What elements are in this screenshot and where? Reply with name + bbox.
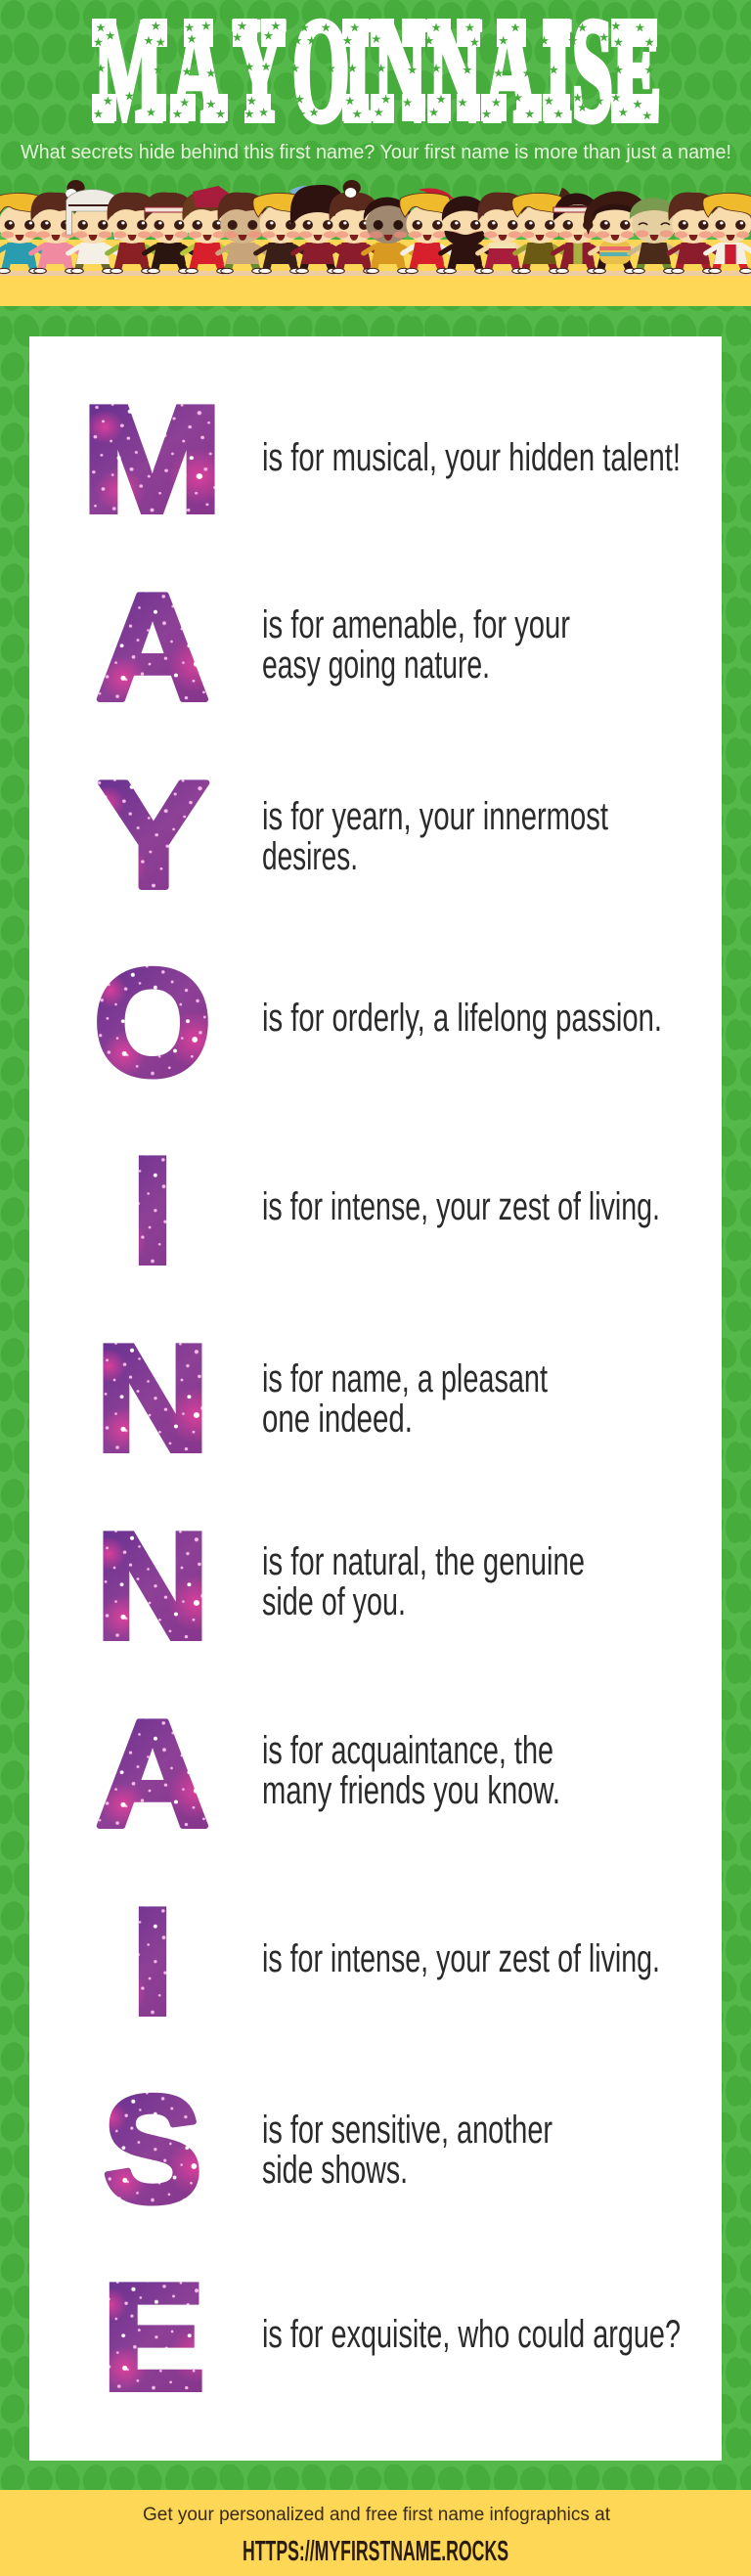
row: N second: side of you.	[262, 1580, 406, 1623]
letter A second: A	[96, 1689, 209, 1858]
row: S	[103, 2065, 552, 2234]
banner: yellow band	[0, 240, 751, 306]
row: A	[96, 562, 570, 732]
letter O: O	[94, 938, 211, 1107]
letter E: E	[102, 2252, 205, 2422]
subtitle: What secrets hide behind this first name? Your first name is more than just a name!	[21, 142, 731, 163]
row: N	[96, 1313, 548, 1483]
row: Y	[98, 750, 608, 919]
letter S: S	[103, 2065, 202, 2234]
row: S: is for sensitive, another	[262, 2109, 552, 2152]
letter M: M	[81, 375, 223, 544]
letter N: N	[96, 1313, 209, 1483]
illustration: row of cartoon children	[0, 180, 751, 274]
letter N second: N	[96, 1501, 209, 1670]
row: A second: many friends you know.	[262, 1769, 560, 1812]
row: I second	[131, 1877, 660, 2046]
row: I	[131, 1126, 660, 1295]
panel: name acrostic	[29, 336, 722, 2461]
row: N: one indeed.	[262, 1398, 413, 1441]
letter I: I	[131, 1126, 174, 1295]
row: Y: desires.	[262, 835, 358, 878]
letter I second: I	[131, 1877, 174, 2046]
row: A second	[96, 1689, 560, 1858]
row: A: easy going nature.	[262, 644, 490, 687]
row: S: side shows.	[262, 2149, 408, 2192]
row: O	[94, 938, 662, 1107]
row: E	[102, 2252, 681, 2422]
row: M	[81, 375, 681, 544]
row: A second: is for acquaintance, the	[262, 1729, 553, 1772]
row: N second: is for natural, the genuine	[262, 1540, 585, 1583]
letter A: A	[96, 562, 209, 732]
footer text: Get your personalized and free first name infographics at	[143, 2505, 611, 2525]
row: N second	[96, 1501, 585, 1670]
row: Y: is for yearn, your innermost	[262, 795, 608, 838]
row: A: is for amenable, for your	[262, 603, 570, 646]
letter Y: Y	[98, 750, 209, 919]
row: N: is for name, a pleasant	[262, 1357, 548, 1400]
footer url: HTTPS://MYFIRSTNAME.ROCKS	[243, 2536, 508, 2567]
footer band	[0, 2490, 751, 2576]
